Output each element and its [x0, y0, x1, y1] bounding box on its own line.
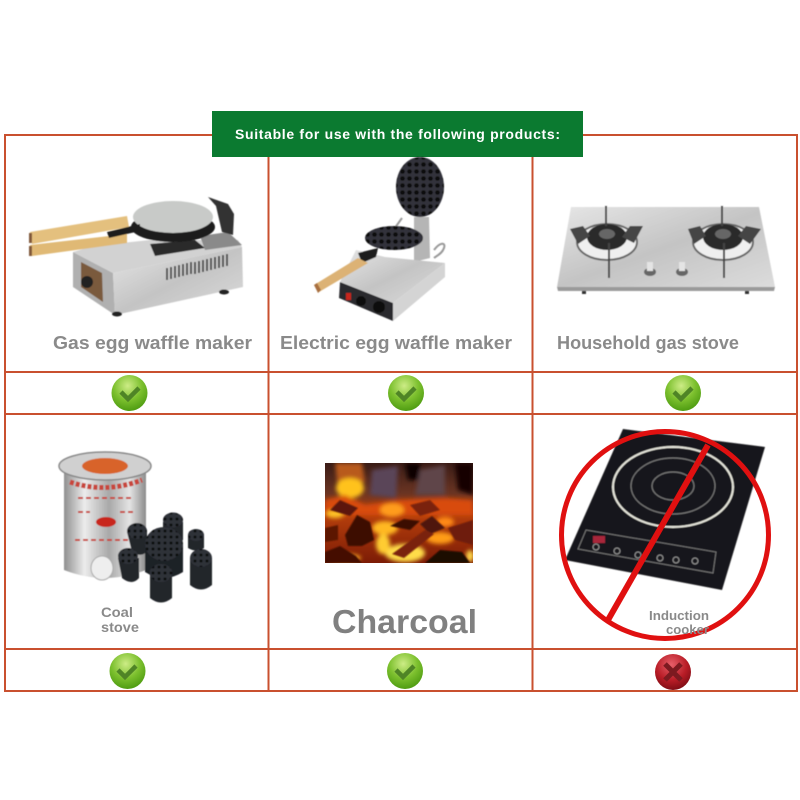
- check mark: [110, 653, 146, 689]
- table grid: [5, 135, 797, 691]
- check mark: [665, 375, 701, 411]
- label: electric egg waffle maker: Electric egg waffle maker: [280, 333, 512, 353]
- check mark: [387, 653, 423, 689]
- icon: induction cooker: [565, 429, 765, 590]
- label: induction cooker: cooker: [666, 622, 709, 637]
- icon: electric waffle maker: [314, 157, 445, 321]
- panel: charcoal: [325, 463, 477, 689]
- label: induction cooker: Induction: [649, 608, 709, 623]
- label: gas egg waffle maker: Gas egg waffle maker: [53, 333, 252, 353]
- label: induction cooker: [649, 608, 709, 637]
- icon: gas stove: [557, 206, 775, 294]
- panel: gas egg waffle maker: [29, 197, 252, 411]
- check mark: [388, 375, 424, 411]
- title banner: Suitable for use with the following products:: [235, 126, 560, 142]
- icon: coal stove with briquettes: [59, 452, 212, 602]
- check mark: [112, 375, 148, 411]
- label: household gas stove: Household gas stove: [557, 333, 739, 353]
- label: charcoal: Charcoal: [332, 603, 477, 640]
- icon: gas waffle maker: [29, 197, 243, 316]
- title banner: [212, 111, 583, 157]
- label: coal stove: stove: [101, 620, 140, 635]
- label: coal stove: [101, 605, 140, 635]
- label: coal stove: Coal: [101, 605, 133, 620]
- panel: induction cooker: [562, 429, 768, 690]
- panel: coal stove: [59, 452, 212, 689]
- panel: household gas stove: [557, 206, 775, 411]
- cross mark: [655, 654, 691, 690]
- prohibition sign: [562, 432, 768, 638]
- icon: burning charcoal: [325, 463, 474, 563]
- panel: electric egg waffle maker: [280, 157, 512, 411]
